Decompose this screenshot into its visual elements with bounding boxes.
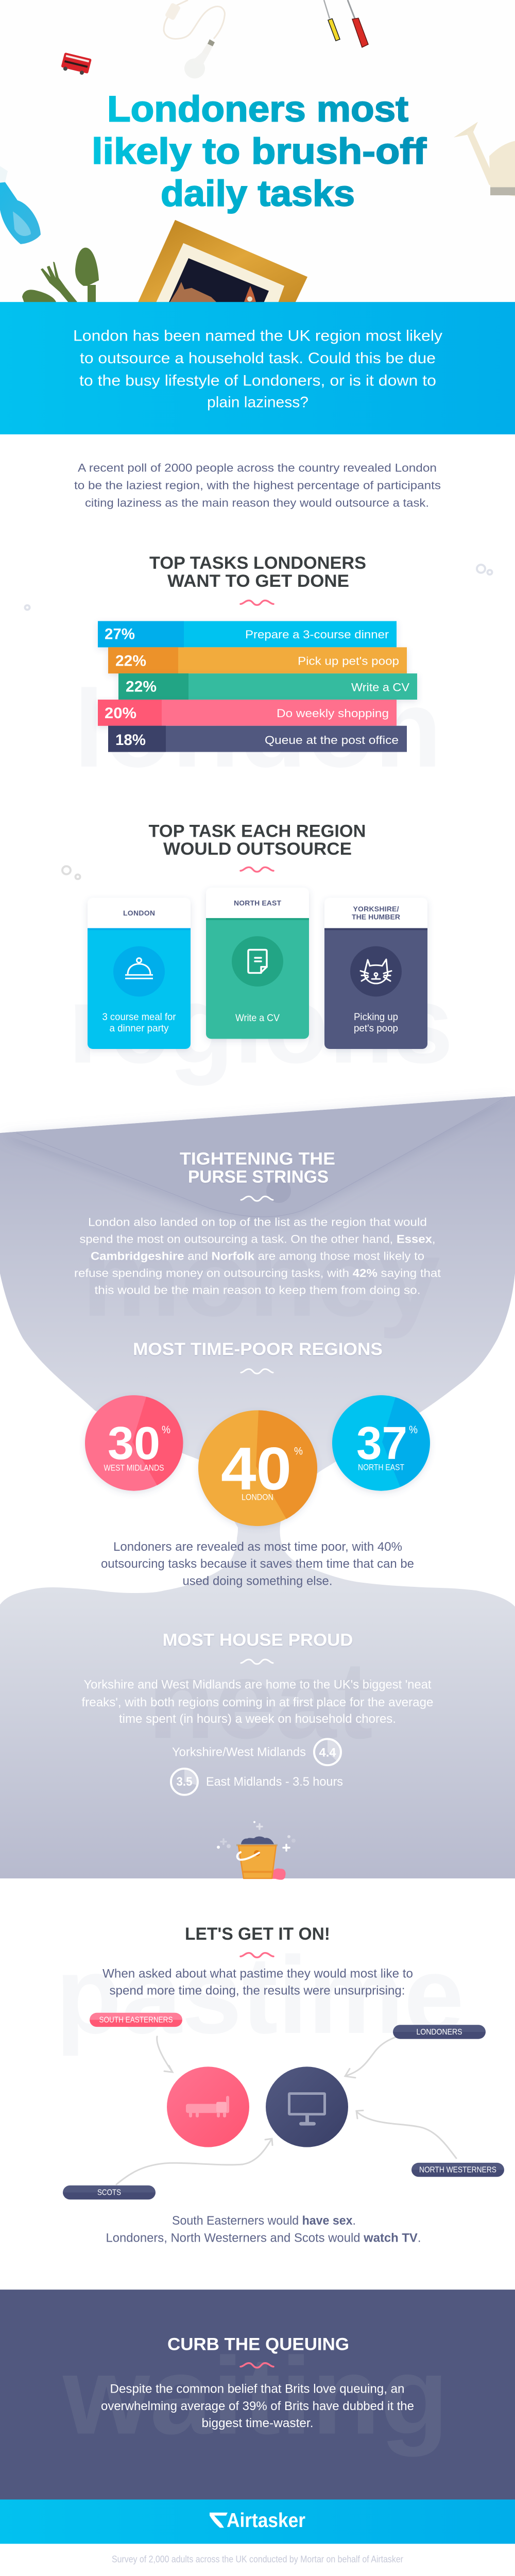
lead paragraph: citing laziness as the main reason they would outsource a task. bbox=[85, 496, 429, 509]
card: London: 3 course meal for bbox=[102, 1011, 176, 1023]
heading: most house proud: MOST HOUSE PROUD bbox=[163, 1631, 353, 1650]
squiggle bbox=[241, 2363, 273, 2368]
watermark: waiting: waiting bbox=[62, 2334, 449, 2457]
bar chart: top tasks bbox=[98, 621, 417, 752]
bar: Do weekly shopping 20% bbox=[98, 700, 397, 726]
heading: top tasks: WANT TO GET DONE bbox=[167, 571, 349, 591]
heading: top tasks bbox=[149, 553, 366, 591]
bar: Do weekly shopping 20%: 20% bbox=[105, 705, 136, 722]
purse strings paragraph: Cambridgeshire and Norfolk are among those most likely to bbox=[91, 1249, 424, 1262]
purse strings paragraph: refuse spending money on outsourcing tasks, with 42% saying that bbox=[74, 1266, 441, 1279]
arrow: north westerners to tv bbox=[356, 2110, 456, 2158]
stat: East Midlands 3.5 bbox=[171, 1768, 343, 1795]
stat: East Midlands 3.5: East Midlands - 3.5 hours bbox=[206, 1775, 343, 1789]
pastime conclusion text bbox=[106, 2214, 421, 2245]
intro text: to the busy lifestyle of Londoners, or is it down to bbox=[79, 372, 436, 389]
time-poor paragraph: outsourcing tasks because it saves them time that can be bbox=[101, 1557, 414, 1571]
purse strings paragraph: London also landed on top of the list as the region that would bbox=[88, 1215, 427, 1228]
pastime paragraph: spend more time doing, the results were unsurprising: bbox=[109, 1984, 405, 1998]
icon: decorative bubbles regions bbox=[62, 866, 80, 879]
bar: Prepare a 3-course dinner 27%: 27% bbox=[105, 626, 135, 643]
bar: Write a CV 22% bbox=[118, 673, 417, 700]
time-poor paragraph bbox=[101, 1540, 414, 1588]
heading: tightening the purse strings: PURSE STRINGS bbox=[188, 1167, 329, 1187]
watermark: neat: neat bbox=[148, 1639, 373, 1761]
card: London bbox=[88, 898, 191, 1049]
watermark: pastime: pastime bbox=[56, 1934, 464, 2056]
stat circle: North East 37% bbox=[332, 1395, 430, 1491]
bar: Queue at the post office 18%: Queue at the post office bbox=[265, 733, 399, 747]
heading: tightening the purse strings: TIGHTENING THE bbox=[180, 1149, 335, 1169]
card: Yorkshire / The Humber bbox=[324, 898, 427, 1049]
title: likely to brush-off bbox=[92, 131, 426, 172]
stat circle: London 40% bbox=[198, 1410, 317, 1526]
card: Yorkshire / The Humber: pet's poop bbox=[354, 1023, 398, 1034]
title: Londoners most bbox=[107, 89, 408, 129]
card: Yorkshire / The Humber: YORKSHIRE/ bbox=[353, 905, 399, 913]
bar: Prepare a 3-course dinner 27%: Prepare a 3-course dinner bbox=[245, 628, 389, 641]
lead paragraph: A recent poll of 2000 people across the country revealed London bbox=[78, 461, 437, 474]
icon: bed circle bbox=[167, 2066, 249, 2147]
bar: Queue at the post office 18% bbox=[108, 726, 407, 752]
stat: East Midlands 3.5: 3.5 bbox=[176, 1775, 193, 1789]
envelope button bbox=[266, 1179, 291, 1203]
card: North East bbox=[206, 888, 309, 1039]
intro text: London has been named the UK region most likely bbox=[73, 328, 442, 344]
stat circle: London 40%: % bbox=[294, 1445, 303, 1457]
card: Yorkshire / The Humber: Picking up bbox=[354, 1011, 398, 1023]
pastime conclusion text: South Easterners would have sex. bbox=[172, 2214, 356, 2228]
card: London: LONDON bbox=[123, 909, 155, 917]
icon: tv circle bbox=[266, 2066, 348, 2147]
stat circle: London 40%: LONDON bbox=[242, 1492, 273, 1502]
heading: let's get it on: LET'S GET IT ON! bbox=[185, 1924, 330, 1944]
heading: top tasks: TOP TASKS LONDONERS bbox=[149, 553, 366, 573]
heading: curb the queuing: CURB THE QUEUING bbox=[167, 2335, 349, 2354]
purse strings paragraph: spend the most on outsourcing a task. On the other hand, Essex, bbox=[80, 1232, 435, 1246]
heading: top task each region: TOP TASK EACH REGION bbox=[148, 822, 366, 841]
pill: scots: SCOTS bbox=[97, 2189, 121, 2197]
bar: Write a CV 22%: 22% bbox=[126, 679, 157, 695]
pastime conclusion text: Londoners, North Westerners and Scots would watch TV. bbox=[106, 2231, 421, 2245]
bar: Prepare a 3-course dinner 27% bbox=[98, 621, 397, 647]
card: Yorkshire / The Humber: THE HUMBER bbox=[352, 913, 400, 921]
pill: north westerners: NORTH WESTERNERS bbox=[419, 2166, 496, 2174]
queuing paragraph bbox=[101, 2382, 414, 2430]
queuing paragraph: overwhelming average of 39% of Brits have dubbed it the bbox=[101, 2399, 414, 2413]
card: London: a dinner party bbox=[109, 1023, 169, 1034]
time-poor paragraph: used doing something else. bbox=[183, 1574, 333, 1588]
intro text: plain laziness? bbox=[207, 394, 308, 411]
footnote: Survey of 2,000 adults across the UK conducted by Mortar on behalf of Airtasker bbox=[112, 2554, 403, 2565]
icon: decorative bubbles top tasks bbox=[25, 565, 492, 610]
watermark: london: london bbox=[74, 667, 442, 790]
stat: Yorkshire / West Midlands 4.4: Yorkshire/West Midlands bbox=[172, 1745, 306, 1759]
hero photo background bbox=[0, 0, 515, 317]
pastime paragraph bbox=[102, 1967, 413, 1998]
bar: Queue at the post office 18%: 18% bbox=[115, 732, 146, 749]
icon: serving cloche bbox=[125, 958, 153, 978]
icon: gold picture frame with Big Ben bbox=[131, 220, 307, 317]
pill: north westerners bbox=[411, 2163, 504, 2177]
title bbox=[92, 89, 426, 214]
heading: top task each region: WOULD OUTSOURCE bbox=[163, 839, 352, 859]
stat circle: North East 37%: 37 bbox=[356, 1418, 407, 1469]
icon: lamp cord and switch bbox=[164, 0, 225, 78]
icon: bucket with sponge and sparkles bbox=[217, 1821, 296, 1880]
squiggle bbox=[241, 600, 273, 605]
arrow: londoners to tv bbox=[345, 2032, 411, 2078]
card: North East: Write a CV bbox=[235, 1012, 280, 1024]
bar: Pick up pet's poop 22%: Pick up pet's poop bbox=[298, 654, 399, 667]
icon: watering can bbox=[454, 122, 515, 196]
logo wordmark: Airtasker bbox=[227, 2510, 305, 2532]
heading: tightening the purse strings bbox=[180, 1149, 335, 1187]
house proud paragraph: freaks', with both regions coming in at first place for the average bbox=[82, 1696, 434, 1709]
watermark: regions: regions bbox=[68, 963, 453, 1086]
stat circle: West Midlands 30%: WEST MIDLANDS bbox=[104, 1463, 164, 1473]
pastime paragraph: When asked about what pastime they would most like to bbox=[102, 1967, 413, 1980]
queuing paragraph: biggest time-waster. bbox=[202, 2416, 313, 2430]
arrow: south easterners to bed bbox=[157, 2037, 173, 2072]
purse strings paragraph: this would be the main reason to keep them from doing so. bbox=[95, 1283, 421, 1297]
pill: scots bbox=[63, 2185, 156, 2199]
squiggle bbox=[241, 1659, 273, 1664]
stat circle: West Midlands 30% bbox=[85, 1395, 183, 1491]
heading: top task each region bbox=[148, 822, 366, 859]
stat circle: West Midlands 30%: % bbox=[162, 1423, 170, 1436]
queuing paragraph: Despite the common belief that Brits love queuing, an bbox=[110, 2382, 404, 2396]
title: daily tasks bbox=[161, 174, 355, 214]
icon: document bbox=[248, 950, 267, 973]
lead paragraph: to be the laziest region, with the highest percentage of participants bbox=[74, 479, 441, 492]
intro text bbox=[73, 328, 442, 411]
house proud paragraph: Yorkshire and West Midlands are home to the UK's biggest 'neat bbox=[83, 1678, 432, 1692]
panel: curb the queuing bbox=[0, 2290, 515, 2500]
icon: spray bottle bbox=[0, 166, 41, 244]
stat circle: West Midlands 30%: 30 bbox=[108, 1418, 160, 1469]
stat: Yorkshire / West Midlands 4.4: 4.4 bbox=[319, 1746, 336, 1759]
watermark: money: money bbox=[82, 1216, 440, 1339]
icon: screwdrivers bbox=[324, 0, 368, 47]
house proud paragraph bbox=[82, 1678, 434, 1726]
pill: south easterners bbox=[90, 2013, 182, 2027]
icon: garden tools bbox=[22, 248, 99, 307]
stat circle: London 40%: 40 bbox=[221, 1435, 291, 1502]
stat circle: North East 37%: % bbox=[409, 1423, 418, 1436]
icon: red london bus bbox=[60, 53, 92, 76]
footer band with logo bbox=[0, 2500, 515, 2544]
arrow: scots to tv bbox=[116, 2139, 272, 2184]
icon: airtasker wing bbox=[210, 2513, 228, 2528]
purse strings paragraph bbox=[74, 1215, 441, 1297]
envelope flap bbox=[0, 1096, 515, 1217]
intro text: to outsource a household task. Could this be due bbox=[80, 350, 436, 367]
card: North East: NORTH EAST bbox=[234, 899, 282, 907]
pill: londoners bbox=[393, 2025, 486, 2039]
lead paragraph bbox=[74, 461, 441, 509]
pill: south easterners: SOUTH EASTERNERS bbox=[99, 2016, 173, 2024]
intro band bbox=[0, 302, 515, 434]
bar: Pick up pet's poop 22% bbox=[108, 647, 407, 673]
icon: cat face bbox=[360, 959, 391, 984]
squiggle bbox=[241, 867, 273, 872]
squiggle bbox=[241, 1369, 273, 1374]
squiggle bbox=[241, 1196, 273, 1201]
bar: Do weekly shopping 20%: Do weekly shopping bbox=[277, 706, 389, 720]
stat circle: North East 37%: NORTH EAST bbox=[358, 1463, 404, 1472]
time-poor paragraph: Londoners are revealed as most time poor, with 40% bbox=[113, 1540, 402, 1554]
bar: Pick up pet's poop 22%: 22% bbox=[115, 653, 146, 669]
heading: most time-poor regions: MOST TIME-POOR REGIONS bbox=[133, 1340, 383, 1359]
squiggle bbox=[241, 1953, 273, 1957]
house proud paragraph: time spent (in hours) a week on household chores. bbox=[119, 1712, 396, 1726]
pill: londoners: LONDONERS bbox=[416, 2028, 462, 2037]
panel: envelope and grey background bbox=[0, 1096, 515, 1878]
stat: Yorkshire / West Midlands 4.4 bbox=[172, 1738, 341, 1765]
bar: Write a CV 22%: Write a CV bbox=[351, 681, 410, 693]
